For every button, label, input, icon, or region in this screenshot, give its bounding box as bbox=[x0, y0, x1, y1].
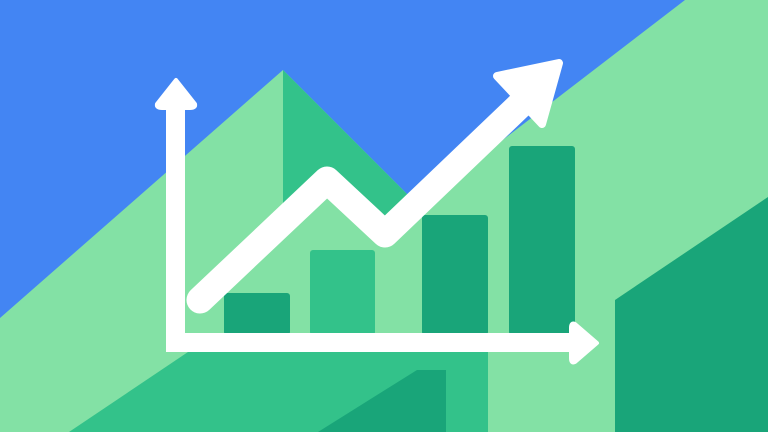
background: dark green block bottom middle bbox=[318, 370, 446, 432]
bar chart bbox=[224, 146, 575, 335]
background: dark green block bottom right bbox=[615, 197, 768, 432]
trend arrow bbox=[200, 63, 559, 300]
background: mid green peak bbox=[283, 70, 418, 234]
background: mid green lower band bbox=[69, 352, 488, 432]
axes with arrows bbox=[157, 80, 597, 362]
